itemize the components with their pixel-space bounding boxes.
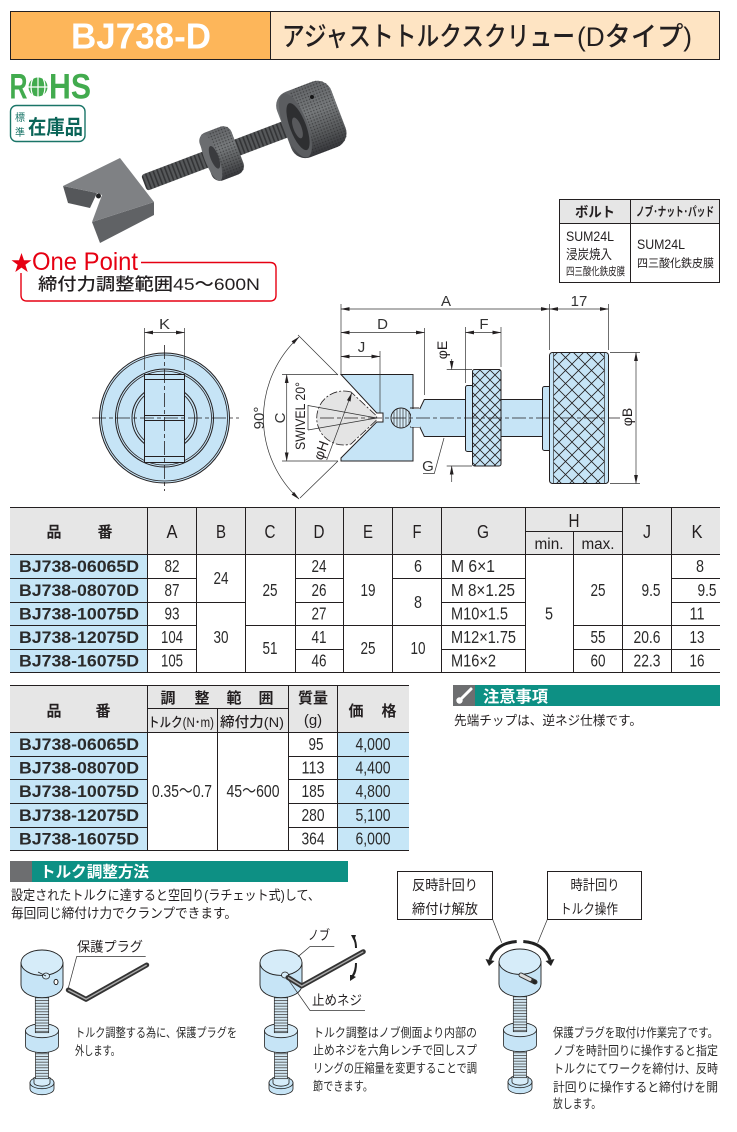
icon: hex wrench bbox=[288, 952, 363, 986]
price table header: 格 bbox=[381, 702, 397, 720]
price table part numbers bbox=[19, 736, 139, 848]
dimensions table values: 105 bbox=[161, 650, 183, 670]
dimensions table values: 10 bbox=[410, 638, 426, 658]
badge: standard stock: 在庫品 bbox=[28, 116, 83, 139]
text: step 2: トルク調整はノブ側面より内部の bbox=[313, 1025, 477, 1040]
table: materials: 四三酸化鉄皮膜 bbox=[566, 264, 625, 278]
price table header: 締付力(N) bbox=[220, 714, 284, 730]
dimensions table header: C bbox=[264, 521, 276, 542]
dimensions table values: 30 bbox=[214, 627, 229, 647]
dimensions table header: A bbox=[166, 521, 178, 542]
RoHS logo: HS bbox=[49, 68, 91, 106]
dimensions table values: 20.6 bbox=[634, 627, 660, 647]
price table values bbox=[152, 734, 391, 848]
price table values: 113 bbox=[302, 758, 324, 778]
dimensions table header: B bbox=[216, 521, 226, 542]
table: materials: ボルト bbox=[575, 204, 615, 220]
heading: product name: アジャストトルクスクリュー bbox=[282, 22, 575, 52]
side view: V block bbox=[341, 374, 413, 461]
panel: torque adjustment method heading: トルク調整方法 bbox=[40, 862, 149, 881]
dimension labels: C bbox=[272, 412, 289, 423]
price table part numbers: BJ738-12075D bbox=[19, 807, 139, 825]
dimensions table part numbers: BJ738-16075D bbox=[19, 652, 139, 670]
label: knob: ノブ bbox=[308, 927, 330, 943]
dimensions table values: 16 bbox=[690, 650, 704, 670]
dimensions table header: 品 bbox=[46, 524, 62, 541]
dimensions table values: M16×2 bbox=[451, 650, 496, 670]
label: protective plug: 保護プラグ bbox=[77, 940, 143, 954]
price table values: 4,800 bbox=[356, 781, 391, 801]
dimension label K: K bbox=[159, 316, 170, 333]
price table part numbers: BJ738-16075D bbox=[19, 830, 139, 848]
dimensions table header bbox=[46, 510, 703, 553]
price table values: 280 bbox=[302, 805, 325, 825]
intro text: 設定されたトルクに達すると空回り(ラチェット式)して、 bbox=[11, 888, 320, 903]
text: step 1: 外します。 bbox=[75, 1044, 120, 1058]
text: step 1: トルク調整する為に、保護プラグを bbox=[75, 1025, 237, 1040]
dimension lines bbox=[263, 304, 640, 499]
table: materials: 四三酸化鉄皮膜 bbox=[637, 256, 714, 270]
dimensions table values: 25 bbox=[262, 580, 278, 600]
dimensions table values: 13 bbox=[690, 627, 704, 647]
price table header: 整 bbox=[194, 689, 210, 707]
price table part numbers: BJ738-08070D bbox=[19, 760, 139, 778]
text: step 3 bbox=[553, 1025, 718, 1111]
dimensions table header: min. bbox=[534, 536, 564, 553]
callout box: clockwise: トルク操作 bbox=[560, 901, 618, 917]
badge: standard stock: 準 bbox=[15, 126, 25, 139]
table: materials bbox=[560, 200, 720, 282]
price table values: 5,100 bbox=[356, 805, 391, 825]
dimensions table header: K bbox=[692, 521, 703, 542]
photo: threaded rod bbox=[141, 118, 297, 191]
callout box: counterclockwise: 反時計回り bbox=[412, 877, 478, 893]
dimensions table header: max. bbox=[582, 536, 614, 553]
dimension labels: φB bbox=[619, 408, 635, 426]
badge: standard stock: 標 bbox=[15, 111, 25, 124]
arrow: clockwise bbox=[523, 942, 554, 966]
price table values: 95 bbox=[308, 734, 324, 754]
price table values: 0.35〜0.7 bbox=[152, 781, 212, 801]
drawing: side view bbox=[251, 293, 640, 499]
dimensions table values: 25 bbox=[590, 580, 606, 600]
dimensions table values: 51 bbox=[262, 638, 278, 658]
text: step 3: トルクにてワークを締付け、反時 bbox=[553, 1062, 718, 1076]
side view: shaft bbox=[419, 400, 543, 436]
price table header: 囲 bbox=[258, 690, 274, 707]
text: step 2: 節できます。 bbox=[313, 1078, 373, 1094]
text: step 1 bbox=[75, 1025, 237, 1058]
dimensions table values: 8 bbox=[696, 556, 704, 576]
dimensions table values: 60 bbox=[590, 650, 606, 670]
price table header: (g) bbox=[304, 712, 322, 729]
price table values: 4,400 bbox=[356, 758, 391, 778]
dimensions table values: 24 bbox=[214, 568, 229, 588]
dimension labels: F bbox=[479, 316, 489, 333]
dimensions table values: M 8×1.25 bbox=[451, 580, 515, 600]
dimensions table part numbers: BJ738-10075D bbox=[19, 606, 139, 624]
dimension labels: φE bbox=[434, 341, 450, 359]
caution text: 先端チップは、逆ネジ仕様です。 bbox=[454, 713, 642, 728]
table: materials: 浸炭焼入 bbox=[566, 247, 612, 262]
dimensions table values: 11 bbox=[690, 604, 704, 624]
dimensions table values: 9.5 bbox=[698, 580, 716, 600]
dimensions table values: M 6×1 bbox=[451, 556, 495, 576]
dimension labels: φH bbox=[310, 439, 332, 462]
illustration: step 1 bbox=[21, 940, 147, 1095]
dimensions table header: F bbox=[412, 521, 422, 542]
intro text: 毎回同じ締付け力でクランプできます。 bbox=[11, 906, 237, 921]
dimensions table values: M10×1.5 bbox=[451, 604, 508, 624]
table: materials: SUM24L bbox=[637, 236, 685, 252]
panel: caution notes bbox=[453, 685, 720, 728]
dimensions table values: 25 bbox=[360, 638, 376, 658]
price table values: 185 bbox=[302, 781, 324, 801]
product photo bbox=[63, 76, 351, 243]
dimensions table part numbers: BJ738-06065D bbox=[19, 558, 139, 576]
dimensions table part numbers: BJ738-12075D bbox=[19, 629, 139, 647]
dimensions table values: 27 bbox=[312, 604, 326, 624]
arrow: counterclockwise bbox=[486, 942, 517, 966]
price table part numbers: BJ738-10075D bbox=[19, 783, 139, 801]
dimensions table values: 6 bbox=[414, 556, 422, 576]
side view: adjusting nut bbox=[466, 370, 501, 466]
text: step 2: リングの圧縮量を変更することで調 bbox=[313, 1060, 477, 1076]
illustration: step 3 bbox=[398, 872, 642, 1094]
drawing: front view bbox=[92, 316, 239, 491]
arrows: rotation bbox=[350, 935, 357, 981]
dimension labels bbox=[251, 293, 635, 475]
callout box: counterclockwise bbox=[398, 872, 492, 920]
price table header: 品 bbox=[46, 703, 62, 720]
callout box: clockwise: 時計回り bbox=[570, 877, 620, 893]
panel: torque adjustment method heading bbox=[10, 861, 348, 882]
price table values: 364 bbox=[302, 828, 325, 848]
RoHS logo: R bbox=[10, 68, 28, 106]
price table values: 4,000 bbox=[356, 734, 391, 754]
side view: tip ball thread bbox=[391, 408, 419, 428]
callout box: clockwise bbox=[548, 872, 642, 920]
dimensions table values: 24 bbox=[312, 556, 327, 576]
RoHS logo bbox=[10, 68, 91, 106]
text: step 3: ノブを時計回りに操作すると指定 bbox=[553, 1043, 718, 1058]
price table header: 番 bbox=[95, 703, 111, 720]
dimension labels: 90° bbox=[251, 407, 268, 429]
dimension labels: A bbox=[441, 293, 451, 310]
dimensions table values: 8 bbox=[414, 592, 422, 612]
dimensions table part numbers: BJ738-08070D bbox=[19, 582, 139, 600]
dimensions table values: 22.3 bbox=[634, 650, 660, 670]
title bar bbox=[10, 12, 720, 60]
dimensions table values: 46 bbox=[312, 650, 326, 670]
icon: hex wrench bbox=[68, 965, 147, 999]
dimensions table values: 5 bbox=[545, 604, 553, 624]
caution heading: 注意事項 bbox=[483, 687, 548, 706]
dimension labels: D bbox=[377, 316, 388, 333]
dimensions table values: 93 bbox=[164, 604, 180, 624]
dimensions table header: D bbox=[314, 521, 324, 542]
dimensions table values: 87 bbox=[164, 580, 180, 600]
dimensions table header: 番 bbox=[97, 524, 113, 541]
dimensions table values: M12×1.75 bbox=[451, 627, 516, 647]
price table header: 調 bbox=[160, 690, 176, 707]
dimensions table header: J bbox=[643, 521, 651, 542]
side view: knob bbox=[542, 352, 608, 484]
price table header bbox=[46, 689, 397, 730]
icon: star bbox=[12, 253, 32, 272]
price table values: 6,000 bbox=[356, 828, 391, 848]
intro text bbox=[11, 888, 320, 921]
table: adjustment range and price bbox=[10, 686, 409, 850]
dimensions table header: H bbox=[568, 510, 580, 531]
price table header: 価 bbox=[348, 703, 364, 720]
badge: standard stock bbox=[10, 106, 85, 142]
text: step 2: 止めネジを六角レンチで回しスプ bbox=[313, 1044, 477, 1058]
dimensions table values: 41 bbox=[312, 627, 326, 647]
dimensions table values: 82 bbox=[164, 556, 180, 576]
photo: V block bbox=[63, 158, 154, 243]
callout text: 締付力調整範囲45〜600N bbox=[38, 275, 260, 294]
side view: swivel ball bbox=[308, 391, 377, 460]
price table part numbers: BJ738-06065D bbox=[19, 736, 139, 754]
dimensions table values: 26 bbox=[312, 580, 326, 600]
label: set screw: 止めネジ bbox=[312, 993, 362, 1008]
illustration: step 2 bbox=[260, 927, 365, 1095]
price table header: 質量 bbox=[298, 690, 328, 707]
table: dimensions bbox=[10, 508, 720, 672]
price table header: トルク(N･m) bbox=[148, 715, 214, 730]
price table values: 45〜600 bbox=[226, 781, 280, 801]
heading: product name: (Dタイプ) bbox=[577, 22, 692, 52]
dimensions table part numbers bbox=[19, 558, 139, 670]
callout heading: One Point bbox=[32, 248, 138, 276]
dimensions table header: E bbox=[363, 521, 373, 542]
table: materials: SUM24L bbox=[566, 228, 614, 244]
dimensions table values: 55 bbox=[590, 627, 606, 647]
photo: nut bbox=[196, 124, 247, 184]
dimensions table header: G bbox=[477, 521, 489, 542]
text: step 3: 放します。 bbox=[553, 1096, 601, 1111]
dimension labels: SWIVEL 20° bbox=[293, 382, 308, 450]
dimensions table values: 104 bbox=[161, 627, 183, 647]
icon: wrench bbox=[456, 689, 471, 704]
dimension labels: G bbox=[422, 458, 434, 475]
callout: One Point bbox=[12, 248, 276, 301]
photo: knob bbox=[272, 76, 351, 162]
dimension labels: 17 bbox=[571, 293, 587, 310]
heading: model number: BJ738-D bbox=[71, 16, 211, 56]
text: step 3: 計回りに操作すると締付けを開 bbox=[553, 1080, 718, 1094]
dimension labels: J bbox=[358, 339, 365, 356]
callout box: counterclockwise: 締付け解放 bbox=[412, 901, 478, 917]
dimensions table values: 9.5 bbox=[642, 580, 660, 600]
dimensions table values bbox=[161, 556, 716, 670]
icon: protective plug bbox=[521, 975, 536, 984]
dimensions table values: 19 bbox=[360, 580, 376, 600]
price table header: 範 bbox=[226, 689, 242, 707]
text: step 2 bbox=[313, 1025, 477, 1094]
